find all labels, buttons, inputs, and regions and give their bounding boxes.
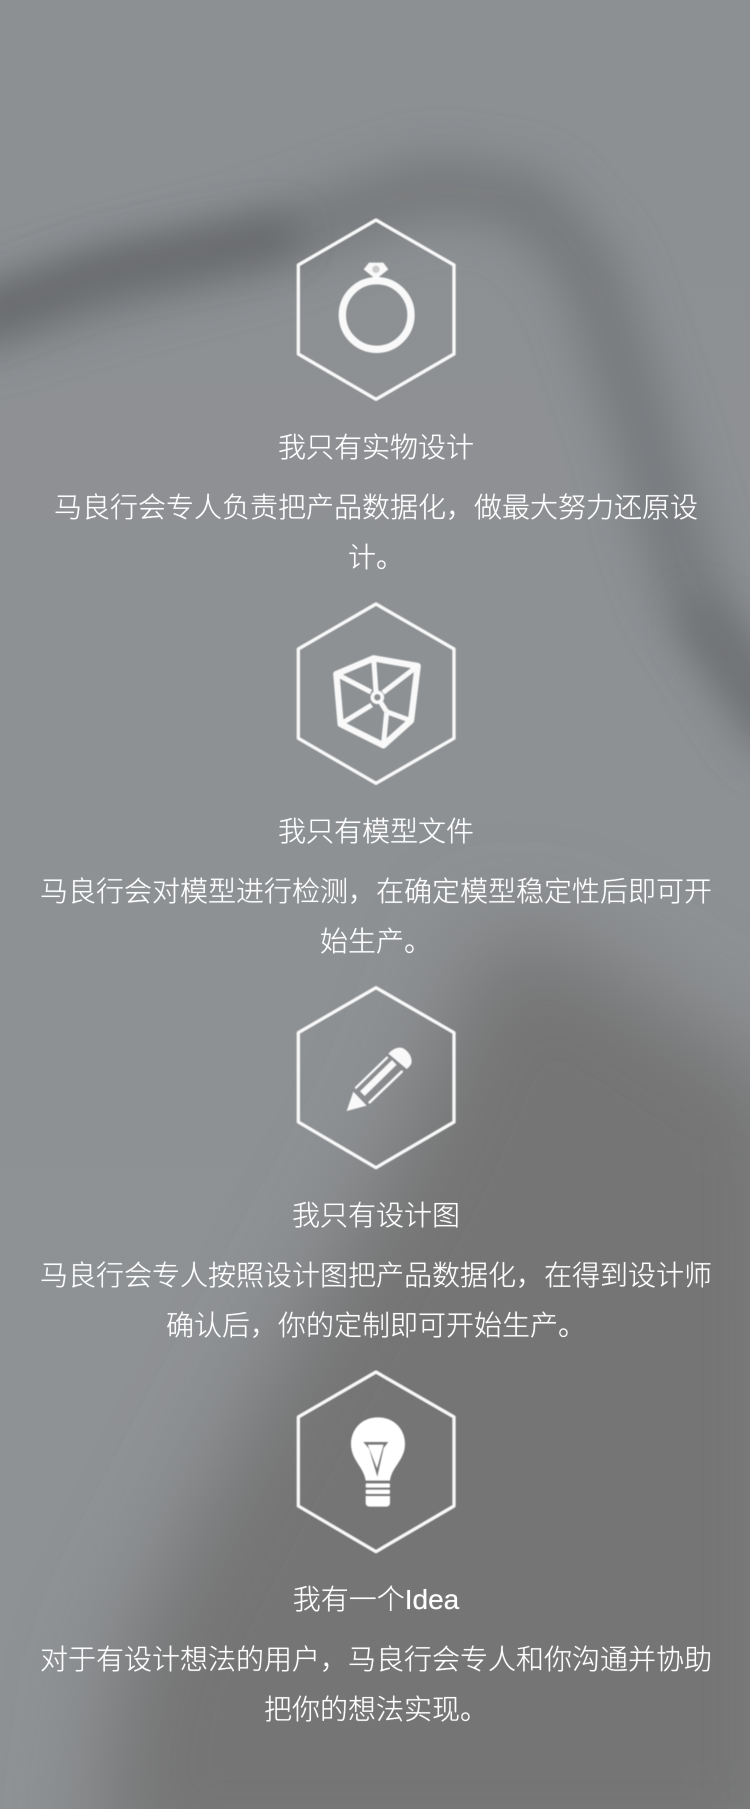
section title 1: 我只有实物设计 bbox=[278, 432, 474, 463]
section description 1: 计。 bbox=[348, 542, 404, 573]
section description 3: 马良行会专人按照设计图把产品数据化，在得到设计师 bbox=[40, 1260, 712, 1291]
section title 4: 我有一个Idea bbox=[293, 1584, 459, 1615]
icon: ring in hexagon bbox=[296, 218, 456, 402]
section description 3: 确认后，你的定制即可开始生产。 bbox=[166, 1310, 586, 1341]
section description 2 bbox=[40, 876, 712, 957]
section description 4: 把你的想法实现。 bbox=[264, 1694, 488, 1725]
section description 2: 马良行会对模型进行检测，在确定模型稳定性后即可开 bbox=[40, 876, 712, 907]
section description 4 bbox=[40, 1644, 712, 1725]
section description 1 bbox=[54, 492, 698, 573]
icon: pencil in hexagon bbox=[296, 986, 456, 1170]
section description 2: 始生产。 bbox=[320, 926, 432, 957]
section title 3: 我只有设计图 bbox=[292, 1200, 460, 1231]
icon: light bulb in hexagon bbox=[296, 1370, 456, 1554]
section description 3 bbox=[40, 1260, 712, 1341]
section description 4: 对于有设计想法的用户，马良行会专人和你沟通并协助 bbox=[40, 1644, 712, 1675]
section description 1: 马良行会专人负责把产品数据化，做最大努力还原设 bbox=[54, 492, 698, 523]
section title 2: 我只有模型文件 bbox=[278, 816, 474, 847]
icon: wireframe cube in hexagon bbox=[296, 602, 456, 786]
